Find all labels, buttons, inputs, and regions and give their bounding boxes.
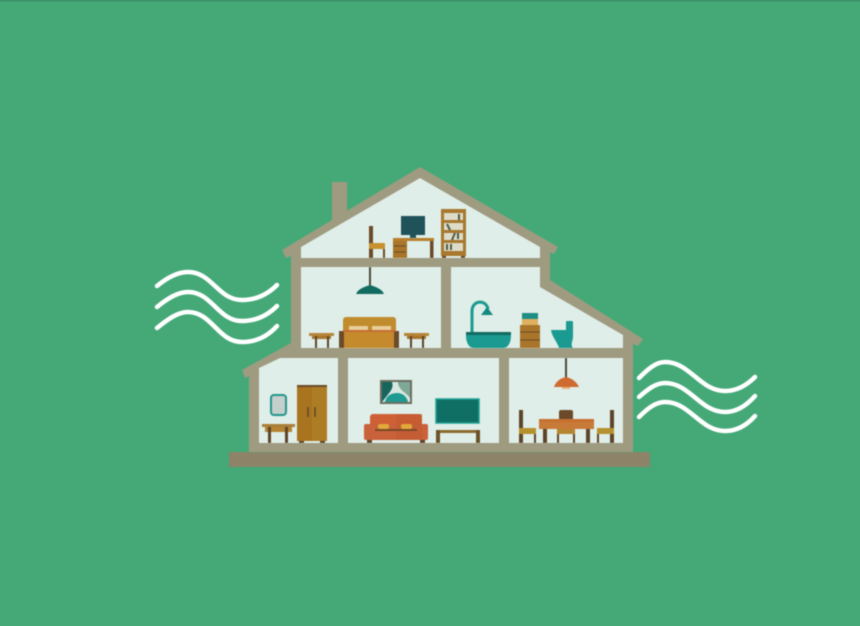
attic room bbox=[301, 178, 540, 258]
ceiling lamp green bbox=[356, 267, 384, 294]
red sofa bbox=[364, 414, 428, 443]
chimney bbox=[332, 182, 347, 227]
wardrobe bbox=[297, 385, 327, 443]
toilet bbox=[551, 321, 573, 348]
ground slab bbox=[229, 452, 650, 467]
bathroom cabinet bbox=[520, 313, 540, 348]
tv stand bbox=[436, 430, 480, 443]
bookshelf bbox=[441, 209, 466, 258]
house structure bbox=[242, 167, 643, 452]
dining room bbox=[509, 358, 623, 443]
dining chair right bbox=[597, 410, 614, 443]
side table left bbox=[309, 333, 334, 348]
sofa mustard bbox=[339, 317, 399, 348]
framed picture bbox=[380, 380, 412, 404]
dining table with chairs bbox=[539, 410, 594, 443]
ground left room bbox=[259, 358, 338, 443]
wall mirror bbox=[271, 395, 286, 415]
study desk chair bbox=[369, 226, 385, 258]
desk bbox=[393, 238, 434, 258]
bathtub with shower bbox=[466, 302, 511, 348]
house outer walls and roofs bbox=[242, 167, 643, 452]
left air waves bbox=[157, 272, 277, 342]
middle left room bbox=[301, 267, 441, 348]
computer monitor bbox=[401, 216, 425, 238]
side table right bbox=[404, 333, 429, 348]
right air waves bbox=[639, 362, 755, 431]
living room bbox=[348, 358, 499, 443]
bathroom bbox=[451, 267, 623, 348]
ceiling lamp orange bbox=[554, 358, 579, 389]
console table bbox=[262, 424, 295, 443]
television bbox=[436, 399, 479, 423]
dining chair left bbox=[519, 410, 536, 443]
